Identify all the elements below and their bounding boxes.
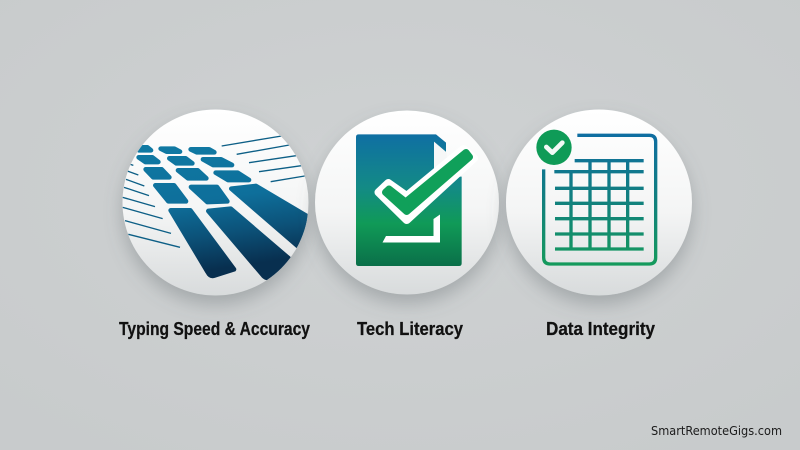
watermark: SmartRemoteGigs.com <box>651 424 782 438</box>
icon: data table disc <box>506 110 692 296</box>
label: Data Integrity: Data Integrity <box>546 319 655 339</box>
icon: keyboard disc <box>122 110 310 296</box>
label: Tech Literacy: Tech Literacy <box>357 319 463 339</box>
label: Typing Speed & Accuracy: Typing Speed & Accuracy <box>119 319 310 339</box>
icon: document with checkmark disc <box>315 110 499 294</box>
infographic canvas <box>114 110 782 438</box>
